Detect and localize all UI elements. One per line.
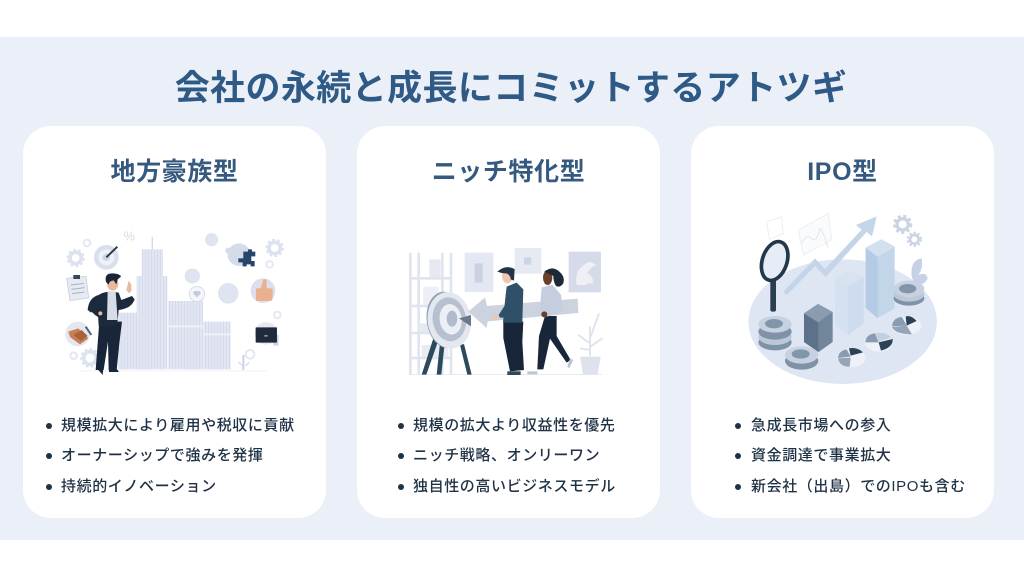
illustration: businessman and city buildings xyxy=(65,230,284,375)
target xyxy=(94,245,119,270)
shelves xyxy=(409,253,452,375)
plant xyxy=(240,355,246,370)
panel: 地方豪族型 xyxy=(23,126,326,518)
thumbs up xyxy=(251,278,275,303)
target legs xyxy=(422,338,472,375)
clipboard xyxy=(67,276,89,301)
bullet 3: 新会社（出島）でのIPOも含む xyxy=(751,478,966,495)
title: 会社の永続と成長にコミットするアトツギ xyxy=(175,69,847,108)
bullet 3: 独自性の高いビジネスモデル xyxy=(413,478,616,495)
arrow xyxy=(468,297,578,328)
coins xyxy=(758,316,792,350)
circles xyxy=(205,233,218,246)
bullet 1: 急成長市場への参入 xyxy=(751,417,891,434)
puzzle xyxy=(228,243,250,266)
bullet list xyxy=(46,417,295,495)
growth arrow xyxy=(783,216,877,295)
illustration: two people carrying an arrow to a target xyxy=(409,248,603,375)
magnifying glass xyxy=(770,280,776,312)
bullet 2: オーナーシップで強みを発揮 xyxy=(61,447,264,464)
businessman xyxy=(88,273,135,375)
man xyxy=(503,322,524,371)
heading: IPO型: IPO型 xyxy=(807,158,878,186)
heading: ニッチ特化型: ニッチ特化型 xyxy=(432,158,585,186)
frames xyxy=(465,253,493,292)
pie pieces xyxy=(838,348,866,367)
bullet 2: ニッチ戦略、オンリーワン xyxy=(413,447,600,464)
bullet 2: 資金調達で事業拡大 xyxy=(751,447,891,464)
bullet 1: 規模拡大により雇用や税収に貢献 xyxy=(61,417,295,434)
leaf xyxy=(911,258,928,284)
bars xyxy=(835,270,864,335)
heading: 地方豪族型: 地方豪族型 xyxy=(110,158,238,186)
target xyxy=(423,289,469,351)
plant and pot xyxy=(578,313,603,356)
panel: IPO型 xyxy=(691,126,994,518)
illustration: businessman and city buildings: % xyxy=(124,230,135,244)
faint chart and dollar note xyxy=(767,217,783,239)
bullet list xyxy=(398,417,616,495)
gears xyxy=(894,216,921,246)
illustration: growth chart, coins and magnifying glass xyxy=(748,213,937,384)
woman xyxy=(537,316,571,369)
bullet 1: 規模の拡大より収益性を優先 xyxy=(413,417,616,434)
bullet 3: 持続的イノベーション xyxy=(61,478,217,495)
bullet list xyxy=(735,417,966,495)
briefcase xyxy=(255,322,277,345)
handshake xyxy=(65,322,90,346)
panel: ニッチ特化型 xyxy=(357,126,660,518)
